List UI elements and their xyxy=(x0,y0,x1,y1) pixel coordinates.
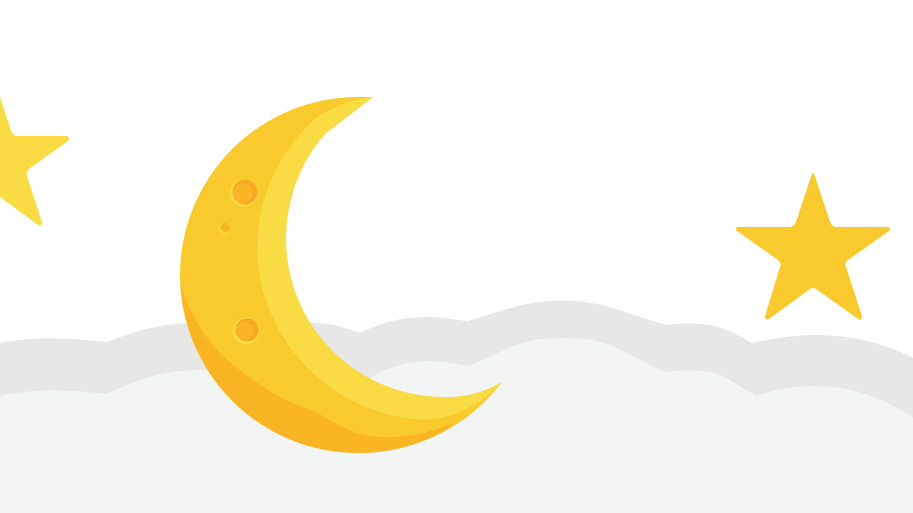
star: right xyxy=(736,173,890,320)
foreground cloud layer xyxy=(0,338,913,513)
background cloud layer xyxy=(0,300,913,513)
crater: large lower xyxy=(232,318,260,344)
moon light band xyxy=(257,97,502,420)
moon body xyxy=(180,97,502,453)
moon shadow xyxy=(180,285,457,453)
crater: small xyxy=(219,222,231,234)
crater: large upper xyxy=(230,179,258,207)
crescent moon xyxy=(180,97,502,453)
star: left, cropped xyxy=(0,97,69,226)
